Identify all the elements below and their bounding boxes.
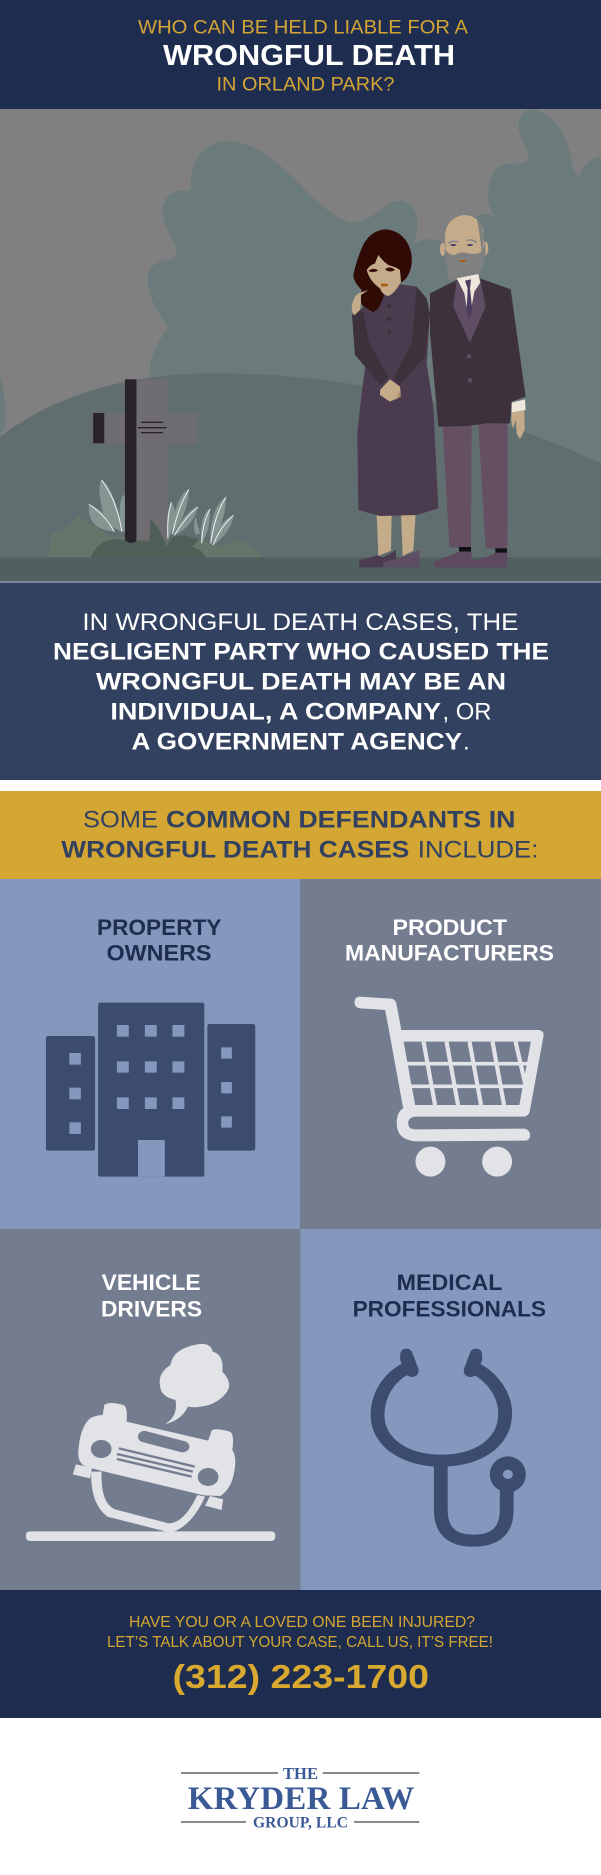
woman figure <box>352 229 438 567</box>
panel: call to action footer <box>0 1590 601 1718</box>
statement line 2: NEGLIGENT PARTY WHO CAUSED THE <box>53 638 549 666</box>
panel: negligent party statement <box>0 583 601 780</box>
title line: wrongful death: WRONGFUL DEATH <box>163 40 455 72</box>
icon: office buildings <box>46 1003 255 1177</box>
icon: shopping cart <box>355 997 544 1177</box>
statement line 4: INDIVIDUAL, A COMPANY <box>110 698 441 726</box>
label: property owners <box>97 915 222 966</box>
panel: common defendants heading <box>0 791 601 879</box>
statement line 5: . <box>463 728 470 756</box>
heading line 2: INCLUDE: <box>418 837 538 864</box>
panel: medical professionals <box>300 1229 601 1590</box>
label: product manufacturers <box>345 915 554 966</box>
cta line 1: HAVE YOU OR A LOVED ONE BEEN INJURED? <box>129 1614 475 1631</box>
label: vehicle drivers <box>101 1270 202 1322</box>
left tree edge <box>0 377 5 437</box>
title line: who can be held liable: WHO CAN BE HELD LIABLE FOR A <box>138 18 468 38</box>
grave cross <box>93 379 197 543</box>
statement line 5: A GOVERNMENT AGENCY <box>132 728 462 756</box>
statement line 3: WRONGFUL DEATH MAY BE AN <box>96 668 506 696</box>
panel: product manufacturers <box>300 879 601 1229</box>
label: medical professionals: PROFESSIONALS <box>353 1297 546 1322</box>
heading line 2: WRONGFUL DEATH CASES <box>61 837 409 864</box>
label: medical professionals: MEDICAL <box>397 1270 503 1295</box>
label: product manufacturers: MANUFACTURERS <box>345 941 554 966</box>
icon: stethoscope <box>378 1349 526 1541</box>
panel: vehicle drivers <box>0 1229 300 1590</box>
icon: overturned car with smoke <box>26 1344 275 1541</box>
heading line 2 <box>61 837 539 864</box>
panel: cemetery illustration <box>0 109 601 583</box>
green mound <box>91 518 205 557</box>
plant leaves <box>89 479 234 546</box>
heading line 1: COMMON DEFENDANTS IN <box>166 807 516 834</box>
panel: property owners <box>0 879 300 1229</box>
logo: the kryder law group: THE <box>283 1764 318 1783</box>
background trees <box>148 109 601 500</box>
phone number: (312) 223-1700 <box>172 1658 429 1695</box>
logo: the kryder law group <box>181 1764 419 1832</box>
title line: in orland park: IN ORLAND PARK? <box>216 74 394 96</box>
label: property owners: PROPERTY <box>97 915 222 940</box>
logo: the kryder law group: KRYDER LAW <box>188 1781 414 1817</box>
hill <box>0 373 601 560</box>
man figure <box>430 215 526 567</box>
label: medical professionals <box>353 1270 546 1322</box>
ground <box>0 557 601 582</box>
logo: the kryder law group: GROUP, LLC <box>253 1815 348 1832</box>
panel: title header <box>0 0 601 109</box>
statement line 4: , OR <box>442 698 492 726</box>
heading line 1: SOME <box>83 807 158 834</box>
label: product manufacturers: PRODUCT <box>392 915 508 940</box>
label: vehicle drivers: DRIVERS <box>101 1297 202 1322</box>
statement line 1: IN WRONGFUL DEATH CASES, THE <box>82 609 518 636</box>
cta line 2: LET’S TALK ABOUT YOUR CASE, CALL US, IT’S FREE! <box>107 1634 493 1651</box>
label: property owners: OWNERS <box>106 941 212 966</box>
label: vehicle drivers: VEHICLE <box>102 1270 201 1295</box>
light bush behind cross <box>48 515 263 557</box>
